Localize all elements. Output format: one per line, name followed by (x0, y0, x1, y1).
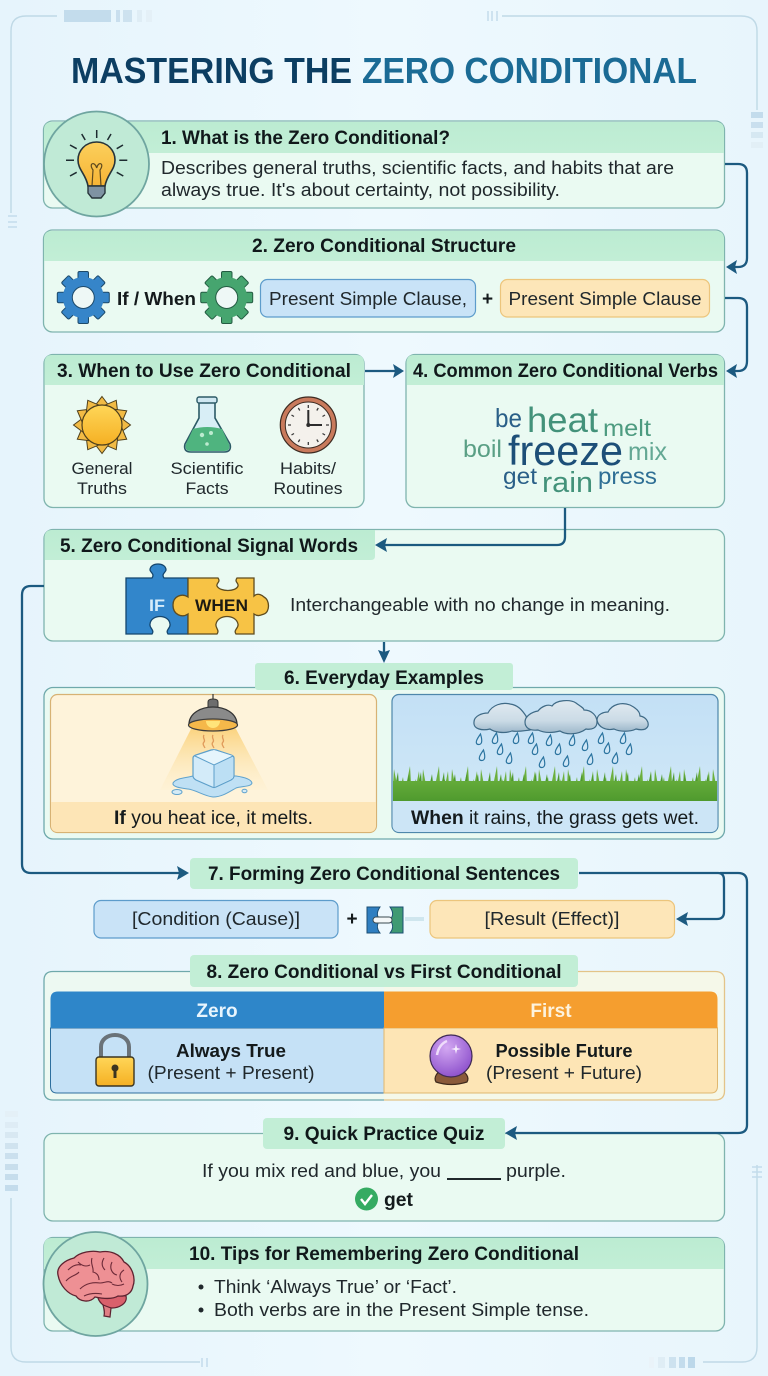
panel 4 heading: 4. Common Zero Conditional Verbs (413, 361, 718, 382)
label: habits / routines (274, 459, 342, 498)
panel 8 outline (44, 972, 724, 1100)
panel 8 heading tab: 8. Zero Conditional vs First Conditional (206, 962, 562, 983)
panel 10: tips (44, 1232, 724, 1336)
icon: light cone (160, 727, 268, 790)
panel 2 header band (44, 231, 724, 261)
panel 3 header band (44, 355, 364, 385)
panel 1 text: Describes general truths, scientific facts, and habits that are (161, 157, 674, 178)
zero header: Zero (196, 1001, 238, 1022)
icon: green gear (201, 272, 253, 324)
panel 9: quiz (44, 1118, 724, 1221)
plus: + (482, 289, 493, 310)
zero text: (Present + Present) (148, 1062, 314, 1083)
word cloud: freeze (508, 427, 623, 474)
arrow: 1 to 2 (725, 164, 747, 274)
tip two: Both verbs are in the Present Simple tense. (214, 1299, 589, 1320)
panel 6 header tab (255, 663, 513, 690)
first header: First (530, 1001, 572, 1022)
word cloud: be (495, 403, 522, 433)
title: ZERO CONDITIONAL (362, 50, 697, 91)
icon: ice cube (193, 750, 234, 788)
panel 5 header tab (44, 530, 375, 560)
panel 1: what is the zero conditional (44, 112, 724, 216)
panel 3: when to use (44, 354, 364, 508)
panel 1 text (161, 157, 674, 200)
icon: brain (44, 1232, 148, 1336)
icon: lock (96, 1035, 134, 1086)
first text: Possible Future (496, 1040, 632, 1061)
panel 1 heading: 1. What is the Zero Conditional? (161, 128, 450, 149)
quiz question (202, 1160, 566, 1181)
icon: rain drops (476, 733, 632, 767)
icon: crystal ball (430, 1035, 472, 1084)
panel 3 heading: 3. When to Use Zero Conditional (57, 361, 351, 382)
arrow: 7 to 9 (505, 873, 747, 1140)
first header (384, 992, 718, 1028)
label: habits / routines: Routines (274, 479, 342, 498)
word cloud (463, 401, 667, 499)
first text: (Present + Future) (486, 1062, 642, 1083)
title (71, 50, 697, 91)
if / when label: If / When (117, 288, 196, 309)
label: general truths (72, 459, 132, 498)
panel 1 icon: light bulb (44, 112, 149, 216)
panel 1 header band (44, 122, 724, 153)
panel 8: zero vs first (44, 955, 724, 1100)
panel 10 heading: 10. Tips for Remembering Zero Conditional (189, 1244, 579, 1265)
icon: clock (280, 397, 336, 453)
label: habits / routines: Habits/ (280, 459, 336, 478)
result box: [Result (Effect)] (484, 908, 620, 929)
word cloud: melt (603, 415, 652, 441)
word cloud: get (503, 463, 538, 489)
word cloud: boil (463, 436, 502, 463)
panel 6 header tab: 6. Everyday Examples (284, 668, 484, 689)
panel 5: signal words (44, 530, 724, 641)
clause box blue: Present Simple Clause, (269, 288, 467, 309)
icon: lamp (188, 694, 238, 731)
arrow: 4 to 5 (375, 508, 565, 552)
tip one: Think ‘Always True’ or ‘Fact’. (214, 1276, 457, 1297)
label: general truths: Truths (77, 479, 127, 498)
first text (486, 1040, 642, 1083)
condition box (94, 900, 338, 938)
panel 5 text: Interchangeable with no change in meaning. (290, 594, 670, 615)
panel 8 heading tab (190, 955, 578, 987)
label: scientific facts: Facts (186, 479, 228, 498)
caption: When it rains, the grass gets wet. (411, 808, 699, 829)
label: scientific facts: Scientific (170, 459, 244, 478)
panel 10 header band (44, 1238, 724, 1269)
label: general truths: General (72, 459, 132, 478)
quiz question: purple. (506, 1160, 566, 1181)
icon: puzzle: WHEN (195, 596, 248, 615)
arrow: 2 to 4 (725, 298, 747, 378)
title: MASTERING THE (71, 50, 352, 91)
arrow: 3 to 4 (365, 364, 404, 378)
panel 4: common verbs (406, 354, 724, 508)
first column (384, 992, 718, 1093)
arrow: 5 to 7 (22, 586, 189, 880)
panel 9 heading tab: 9. Quick Practice Quiz (284, 1124, 484, 1145)
icon: connector (367, 907, 424, 933)
icon: puddle (172, 776, 252, 797)
icon: puzzle: IF (149, 596, 165, 615)
word cloud: rain (542, 467, 593, 499)
icon: blue gear (57, 272, 109, 324)
icon: steam (203, 735, 224, 748)
panel 4 header band (406, 355, 724, 385)
result box (430, 900, 674, 938)
icon: puzzle (126, 564, 268, 634)
word cloud: press (598, 463, 657, 489)
word cloud: heat (527, 401, 598, 440)
icon: grass (393, 765, 717, 801)
caption: If you heat ice, it melts. (114, 808, 313, 829)
zero text: Always True (176, 1040, 286, 1061)
panel 7 heading tab (190, 858, 578, 889)
clause box orange (500, 280, 710, 317)
zero column (50, 992, 384, 1093)
arrow: 7 to result (579, 873, 724, 926)
zero text (148, 1040, 314, 1083)
icon: clouds (474, 701, 648, 734)
panel 9 heading tab (263, 1118, 505, 1149)
quiz answer: get (384, 1190, 414, 1211)
quiz answer (355, 1188, 414, 1211)
example card: heat ice (50, 694, 376, 832)
example card: rain (392, 694, 718, 832)
card caption band (51, 802, 376, 832)
panel 6: everyday examples (44, 663, 724, 839)
icon: flask (185, 397, 230, 452)
condition box: [Condition (Cause)] (132, 908, 300, 929)
card caption band (392, 801, 718, 832)
word cloud: mix (628, 438, 667, 466)
clause box orange: Present Simple Clause (508, 288, 702, 309)
icon: sun (71, 394, 133, 456)
arrow: 5 to 6 (378, 642, 390, 663)
plus: + (346, 909, 358, 930)
panel 7 heading tab: 7. Forming Zero Conditional Sentences (208, 864, 560, 885)
panel 2: structure (44, 230, 724, 332)
label: scientific facts (170, 459, 244, 498)
panel 7: forming sentences (94, 858, 674, 938)
zero header (50, 992, 384, 1028)
quiz question: If you mix red and blue, you (202, 1160, 441, 1181)
panel 1 text: always true. It's about certainty, not possibility. (161, 179, 560, 200)
panel 2 heading: 2. Zero Conditional Structure (252, 236, 516, 257)
clause box blue (260, 280, 476, 317)
panel 5 heading: 5. Zero Conditional Signal Words (60, 536, 358, 557)
